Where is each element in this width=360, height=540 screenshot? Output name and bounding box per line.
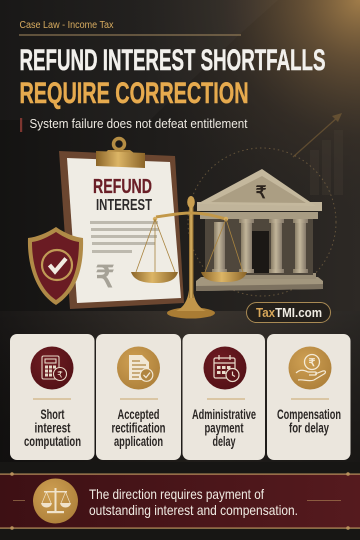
icon: bank building <box>188 148 336 296</box>
label: rectification <box>112 420 166 436</box>
label <box>24 406 81 449</box>
icon: bank building: ₹ <box>256 183 267 202</box>
label: application <box>114 433 163 449</box>
label: Accepted <box>118 406 160 422</box>
panel: administrative payment delay <box>182 334 265 460</box>
brand badge <box>246 302 330 322</box>
icon: clipboard with document <box>59 138 184 309</box>
banner: conclusion <box>0 472 360 530</box>
label: payment <box>204 420 244 436</box>
label: computation <box>24 433 81 449</box>
icon: clipboard with document: ₹ <box>95 261 115 294</box>
background growth chart <box>293 113 343 195</box>
label: interest <box>34 420 71 436</box>
brand badge: TaxTMI.com <box>256 305 322 320</box>
panel: accepted rectification application <box>96 334 181 460</box>
label: for delay <box>289 420 329 436</box>
icon: scales <box>33 478 78 524</box>
label <box>192 406 256 449</box>
title: REQUIRE CORRECTION <box>20 77 248 110</box>
category label: Case Law - Income Tax <box>20 20 114 31</box>
panel: compensation for delay <box>267 334 350 460</box>
icon: shield with check <box>28 227 83 305</box>
clipboard heading: REFUND <box>93 176 152 198</box>
clipboard heading: INTEREST <box>96 197 152 214</box>
header rule <box>19 34 241 36</box>
banner text: outstanding interest and compensation. <box>89 502 298 518</box>
icon: scales of justice <box>131 196 247 318</box>
title <box>20 44 326 110</box>
banner text: The direction requires payment of <box>89 486 264 502</box>
label: delay <box>212 433 236 449</box>
icon: document with check <box>117 346 160 390</box>
subtitle: System failure does not defeat entitlement <box>30 116 248 131</box>
label: Short <box>40 406 65 422</box>
label: Administrative <box>192 406 256 422</box>
icon: calculator: ₹ <box>57 370 63 380</box>
banner text <box>89 486 298 518</box>
icon: hand holding rupee coin: ₹ <box>309 357 316 369</box>
panel: short interest computation <box>10 334 94 460</box>
label <box>277 406 341 436</box>
clipboard heading <box>93 176 152 214</box>
icon: calendar with clock <box>204 346 246 390</box>
label <box>112 406 166 449</box>
